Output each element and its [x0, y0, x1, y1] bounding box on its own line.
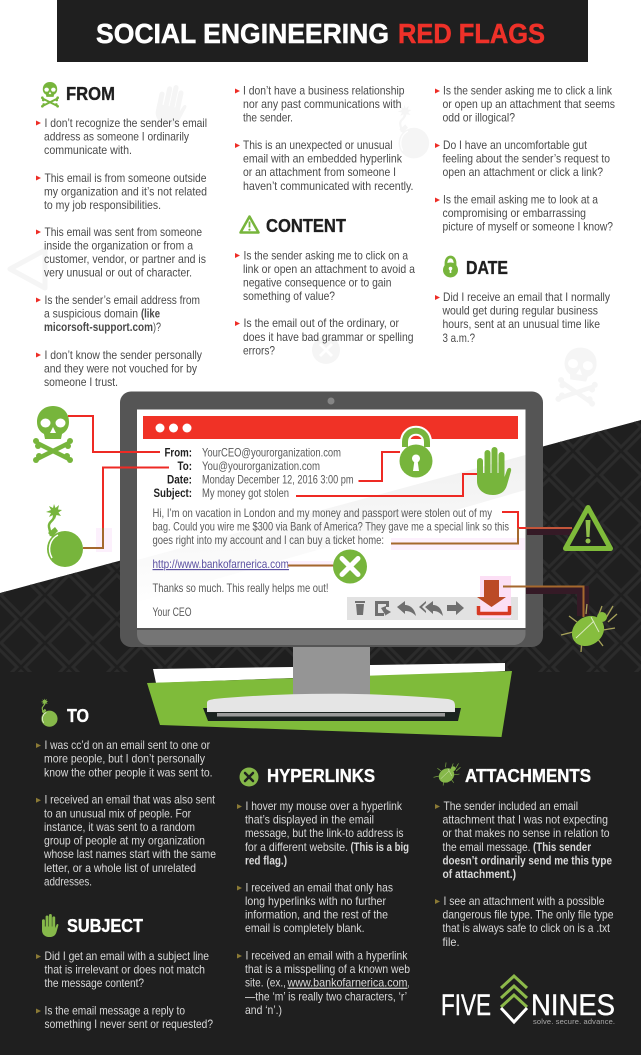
section: CONTENT: link or open an attachment to avoid a: [243, 262, 415, 276]
section: HYPERLINKS: (This is a big: [350, 840, 409, 854]
section: HYPERLINKS: —the ‘m’ is really two characters, ‘r’: [245, 989, 407, 1003]
email headers: To:: [178, 459, 192, 473]
title banner: RED FLAGS: [398, 18, 545, 49]
section: CONTENT continued: compromising or embarrassing: [442, 206, 586, 220]
section: DATE: [435, 257, 610, 345]
section: HYPERLINKS: I received an email that only has: [246, 880, 393, 894]
section: SUBJECT: the message content?: [44, 976, 144, 990]
section: TO: to an unusual mix of people. For: [44, 806, 191, 820]
section: FROM: I don’t recognize the sender’s email: [44, 116, 207, 130]
section: FROM: inside the organization or from a: [44, 239, 193, 253]
section: SUBJECT: Is the email message a reply to: [44, 1004, 185, 1018]
section: HYPERLINKS: ,: [408, 976, 410, 990]
title banner: SOCIAL ENGINEERING: [96, 18, 389, 49]
section: CONTENT continued: Is the sender asking me to click a link: [443, 84, 613, 98]
section: CONTENT continued: open an attachment or click a link?: [442, 165, 603, 179]
email headers: Date:: [167, 472, 192, 486]
section: CONTENT continued: [435, 84, 615, 234]
icon: bug: [434, 762, 460, 786]
heading: DATE: DATE: [466, 258, 508, 278]
heading: HYPERLINKS: HYPERLINKS: [267, 766, 375, 786]
email body: Your CEO: [152, 605, 192, 619]
section: HYPERLINKS: I hover my mouse over a hyperlink: [246, 799, 403, 813]
section: FROM: )?: [153, 320, 161, 334]
section: SUBJECT: [36, 914, 213, 1031]
logo: Five Nines: solve. secure. advance.: [533, 1017, 615, 1026]
section: FROM: someone I trust.: [44, 375, 118, 389]
title banner: [57, 0, 588, 62]
section: FROM: communicate with.: [44, 143, 132, 157]
section: DATE: 3 a.m.?: [442, 331, 475, 345]
section: FROM: to my job responsibilities.: [44, 198, 161, 212]
icon: bomb callout: [46, 504, 83, 567]
icon: warning triangle callout: [566, 508, 610, 548]
section: CONTENT continued: Do I have an uncomfortable gut: [443, 138, 588, 152]
section: FROM: my organization and it’s not related: [44, 185, 207, 199]
section: ATTACHMENTS: The sender included an email: [444, 799, 578, 813]
section: CONTENT: negative consequence or to gain: [243, 276, 392, 290]
section: HYPERLINKS: that is a misspelling of a known web: [245, 962, 410, 976]
section: FROM: I don’t know the sender personally: [44, 348, 202, 362]
section: FROM continued: [235, 84, 414, 193]
section: ATTACHMENTS: the email message.: [442, 840, 530, 854]
section: TO: I was cc’d on an email sent to one or: [44, 738, 210, 752]
section: HYPERLINKS: red flag.): [245, 853, 287, 867]
email headers: My money got stolen: [202, 486, 289, 500]
email toolbar: [347, 597, 518, 620]
section: DATE: Did I receive an email that I normally: [443, 290, 610, 304]
section: ATTACHMENTS: of attachment.): [442, 867, 516, 881]
section: FROM continued: haven’t communicated with recently.: [243, 179, 414, 193]
section: ATTACHMENTS: or that makes no sense in relation to: [442, 826, 610, 840]
email body: [152, 506, 509, 619]
section: CONTENT: does it have bad grammar or spelling: [243, 330, 414, 344]
icon: warning triangle: [240, 216, 258, 232]
icon: bug callout: [561, 604, 617, 652]
section: ATTACHMENTS: (This sender: [533, 840, 591, 854]
email body: http://www.bankofarnerica.com: [152, 557, 289, 571]
heading: CONTENT: CONTENT: [266, 216, 346, 236]
section: TO: letter, or a whole list of unrelated: [44, 861, 196, 875]
logo: Five Nines: NINES: [531, 989, 615, 1022]
faint background watermark icons: [10, 82, 603, 407]
section: HYPERLINKS: information, and the rest of the: [245, 908, 388, 922]
icon: hand callout: [477, 447, 511, 495]
section: HYPERLINKS: message, but the link-to address is: [245, 826, 404, 840]
section: HYPERLINKS: that’s displayed in the email: [245, 813, 374, 827]
section: TO: [36, 698, 216, 888]
section: HYPERLINKS: site. (ex.,: [245, 976, 286, 990]
email headers: Subject:: [154, 486, 192, 500]
section: TO: group of people at my organization: [44, 834, 205, 848]
section: SUBJECT: that is irrelevant or does not match: [44, 963, 205, 977]
heading: TO: TO: [67, 706, 89, 726]
section: FROM continued: the sender.: [243, 111, 293, 125]
section: FROM continued: This is an unexpected or unusual: [243, 138, 392, 152]
section: ATTACHMENTS: [434, 762, 614, 949]
section: CONTENT: Is the email out of the ordinary, or: [244, 316, 399, 330]
icon: X link callout: [333, 550, 367, 584]
email headers: YourCEO@yourorganization.com: [202, 446, 341, 460]
window title bar: [143, 416, 518, 439]
section: CONTENT: Is the sender asking me to click on a: [244, 248, 408, 262]
section: CONTENT continued: picture of myself or someone I know?: [442, 220, 613, 234]
section: SUBJECT: Did I get an email with a subject line: [44, 949, 209, 963]
section: FROM continued: or an attachment from someone I: [243, 165, 396, 179]
section: HYPERLINKS: www.bankofarnerica.com: [287, 976, 408, 990]
section: CONTENT: [235, 216, 415, 358]
logo: Five Nines: FIVE: [441, 989, 491, 1022]
email body: Hi, I’m on vacation in London and my money and passport were stolen out of my: [152, 506, 492, 520]
section: FROM: (like: [141, 307, 160, 321]
section: TO: whose last names start with the same: [43, 847, 216, 861]
section: FROM: customer, vendor, or partner and is: [44, 252, 206, 266]
icon: bomb: [41, 698, 58, 727]
section: CONTENT: something of value?: [243, 289, 335, 303]
section: DATE: hours, sent at an unusual time like: [442, 317, 600, 331]
section: HYPERLINKS: long hyperlinks with no further: [245, 894, 386, 908]
section: ATTACHMENTS: file.: [442, 935, 460, 949]
section: CONTENT continued: Is the email asking me to look at a: [443, 192, 598, 206]
section: FROM continued: nor any past communications with: [243, 97, 402, 111]
section: TO: know the other people it was sent to.: [44, 765, 212, 779]
section: TO: more people, but I don’t personally: [44, 752, 205, 766]
section: FROM: This email was sent from someone: [44, 225, 202, 239]
section: CONTENT continued: feeling about the sender’s request to: [442, 152, 610, 166]
icon: skull: [41, 82, 59, 108]
section: FROM continued: email with an embedded hyperlink: [243, 152, 403, 166]
section: CONTENT continued: or open up an attachment that seems: [442, 97, 615, 111]
logo: Five Nines: [441, 976, 615, 1026]
section: CONTENT continued: odd or illogical?: [442, 111, 515, 125]
section: TO: instance, it was sent to a random: [44, 820, 195, 834]
icon: padlock callout: [400, 431, 432, 478]
icon: X circle: [240, 768, 258, 786]
section: FROM: This email is from someone outside: [44, 171, 207, 185]
monitor stand and base: [147, 647, 512, 737]
section: ATTACHMENTS: dangerous file type. The only file type: [442, 908, 614, 922]
heading: SUBJECT: SUBJECT: [67, 916, 143, 936]
section: FROM continued: I don’t have a business relationship: [243, 84, 405, 98]
section: CONTENT: errors?: [243, 344, 275, 358]
icon: padlock: [443, 257, 458, 278]
section: DATE: would get during regular business: [442, 304, 598, 318]
email headers: From:: [164, 446, 192, 460]
section: TO: I received an email that was also sent: [44, 793, 216, 807]
section: HYPERLINKS: [237, 766, 410, 1017]
diamond background pattern: [0, 420, 641, 672]
section: HYPERLINKS: for a different website.: [245, 840, 348, 854]
email headers: You@yourorganization.com: [202, 459, 320, 473]
heading: FROM: FROM: [66, 84, 115, 104]
heading: ATTACHMENTS: ATTACHMENTS: [465, 766, 591, 786]
monitor: [120, 392, 543, 647]
section: ATTACHMENTS: I see an attachment with a possible: [444, 894, 605, 908]
icon: download callout: [477, 580, 510, 614]
dark lower background: [0, 420, 641, 1055]
icon: hand: [42, 914, 58, 937]
section: TO: addresses.: [44, 874, 92, 888]
section: FROM: very unusual or out of character.: [44, 266, 192, 280]
section: HYPERLINKS: and ‘n’.): [245, 1003, 282, 1017]
section: FROM: [36, 82, 207, 389]
section: ATTACHMENTS: attachment that I was not expecting: [442, 813, 608, 827]
section: FROM: micorsoft-support.com: [44, 320, 153, 334]
email body: bag. Could you wire me $300 via Bank of America? They gave me a special link so this: [152, 520, 509, 534]
email body: Thanks so much. This really helps me out!: [152, 581, 328, 595]
section: ATTACHMENTS: that is always safe to click on is a .txt: [442, 921, 611, 935]
email window: [137, 410, 526, 628]
icon: skull callout: [33, 406, 73, 463]
section: HYPERLINKS: I received an email with a hyperlink: [246, 948, 408, 962]
section: FROM: Is the sender’s email address from: [44, 293, 200, 307]
section: FROM: and they were not vouched for by: [44, 362, 197, 376]
section: HYPERLINKS: email is completely blank.: [245, 921, 364, 935]
section: FROM: address as someone I ordinarily: [44, 130, 189, 144]
email headers: Monday December 12, 2016 3:00 pm: [202, 472, 354, 486]
section: FROM: a suspicious domain: [44, 307, 138, 321]
email headers: [154, 446, 354, 500]
email body: goes right into my account and I can buy a ticket home:: [152, 533, 384, 547]
callout connectors: [68, 416, 589, 618]
section: SUBJECT: something I never sent or requested?: [44, 1017, 213, 1031]
